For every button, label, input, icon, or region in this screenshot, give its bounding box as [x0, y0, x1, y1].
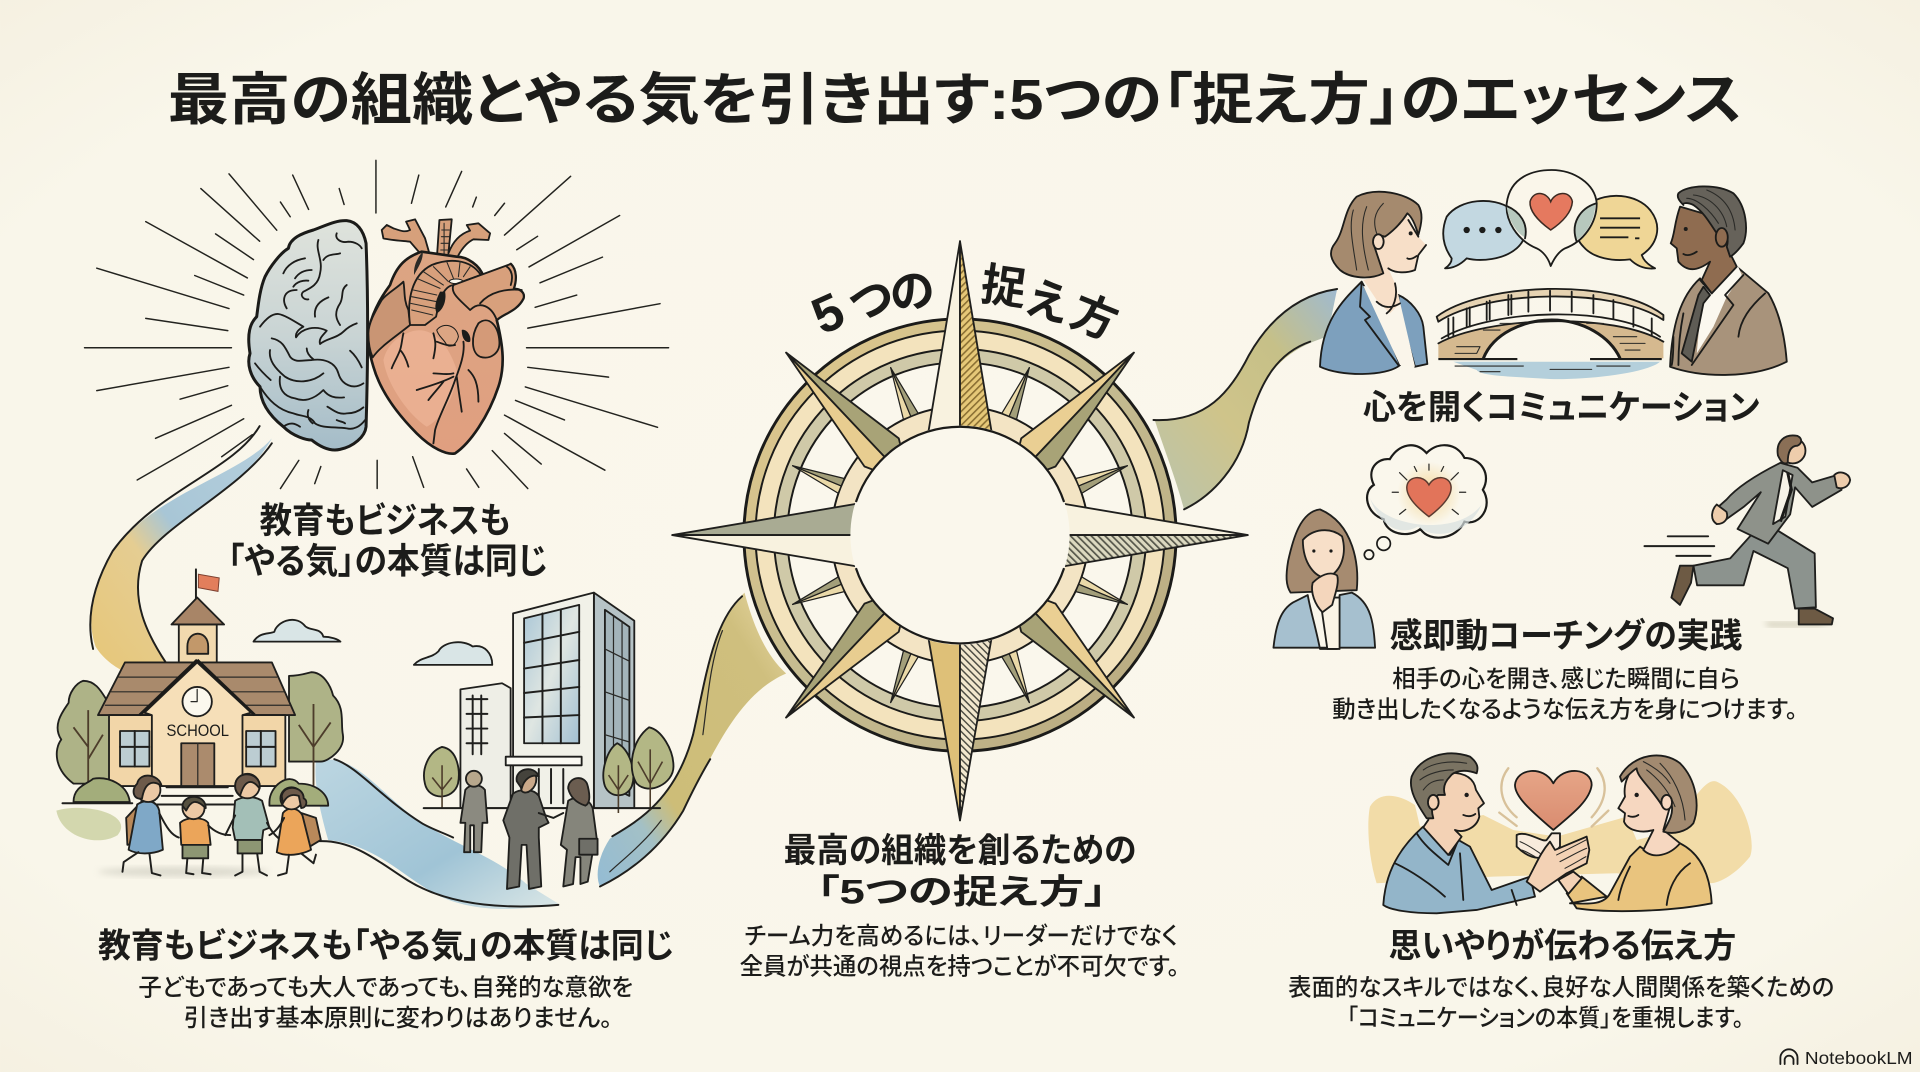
compass curved label: え: [1022, 272, 1075, 332]
text: center description: 全員が共通の視点を持つことが不可欠です。: [740, 954, 1179, 981]
text: center heading: [784, 832, 1136, 912]
compass curved label: [803, 259, 1125, 350]
floating heart: [1499, 768, 1608, 830]
woman in yellow sweater: [1567, 755, 1712, 911]
school roof: [98, 662, 295, 715]
windows: [120, 731, 276, 767]
door: [181, 743, 214, 786]
text: center description: チーム力を高めるには、リーダーだけでなく: [744, 923, 1178, 950]
legs: [1693, 522, 1816, 609]
businessman at left: [460, 771, 487, 852]
text: center heading: 「5つの捉え方」: [817, 874, 1107, 912]
illustration: business buildings and people: [424, 593, 673, 889]
woman in blue jacket: [1320, 192, 1427, 374]
illustration: thinking woman: [1273, 435, 1850, 649]
clock: [182, 687, 212, 716]
arrow: ribbon from business to compass: [598, 593, 786, 886]
heart body: [368, 252, 524, 454]
illustration: caring couple with heart: [1368, 753, 1752, 913]
compass curved label: の: [886, 263, 938, 321]
left atrium flap: [368, 282, 410, 357]
child: boy with orange shirt: [180, 797, 230, 874]
text: left description: [138, 974, 633, 1032]
icon: cloud by buildings: [414, 642, 492, 665]
man in blue shirt: [1383, 753, 1535, 913]
ground wash: [56, 808, 121, 840]
business handshake pair: [503, 769, 598, 889]
tower: [171, 598, 224, 669]
text: caring description: 「コミュニケーションの本質」を重視します。: [1347, 1005, 1744, 1032]
child: girl with blue dress: [98, 776, 269, 877]
torso and arms: [1715, 463, 1842, 544]
water under bridge: [1438, 359, 1662, 379]
stone bridge: [1437, 289, 1663, 358]
man in brown jacket: [1670, 186, 1787, 375]
compass curved label: 5: [803, 281, 853, 345]
trees beside buildings: [424, 727, 673, 813]
text: coaching description: [1332, 665, 1798, 724]
pulmonary artery: [453, 264, 524, 320]
school sign: SCHOOL: [167, 721, 229, 740]
icon: NotebookLM mark: [1780, 1049, 1798, 1064]
illustration: open communication: [1320, 170, 1787, 379]
text: caring description: 表面的なスキルではなく、良好な人間関係を築くための: [1288, 974, 1834, 1001]
small building: [460, 683, 511, 808]
compass small spikes: [790, 365, 1130, 706]
compass rose: [672, 241, 1248, 820]
heading: left section: 教育もビジネスも「やる気」の本質は同じ: [98, 928, 673, 966]
compass curved label: 方: [1064, 285, 1125, 350]
child: older boy with teal shirt: [225, 774, 284, 875]
arrow: ribbon from brain to school: [90, 426, 272, 682]
heading: brain and heart label: 教育もビジネスも: [260, 501, 511, 541]
bushes: [74, 778, 328, 806]
text: caring description: [1288, 974, 1834, 1032]
speech bubble: dots: [1443, 201, 1525, 268]
compass diagonal points: [786, 353, 1134, 718]
text: center description: [740, 923, 1179, 981]
title: 最高の組織とやる気を引き出す:5つの「捉え方」のエッセンス: [168, 68, 1742, 131]
compass curved label: 捉: [978, 259, 1030, 315]
illustration: school with children: [56, 569, 343, 877]
tall building: [506, 593, 634, 808]
speech bubble: heart: [1507, 170, 1597, 266]
arrow: river from school to business: [315, 759, 558, 909]
heading: coaching: 感即動コーチングの実践: [1390, 618, 1742, 656]
child: girl with orange dress: [269, 787, 321, 875]
text: left description: 引き出す基本原則に変わりはありません。: [184, 1005, 612, 1032]
compass outer rings: [744, 319, 1176, 751]
background wash: [1368, 781, 1752, 883]
compass curved label: つ: [843, 270, 899, 332]
text: left description: 子どもであっても大人であっても、自発的な意欲を: [138, 974, 633, 1001]
trees beside school: [57, 672, 343, 796]
icon: brain: [249, 221, 368, 450]
compass center hub: [850, 425, 1070, 645]
right atrium lump: [473, 320, 499, 358]
text: coaching description: 相手の心を開き、感じた瞬間に自ら: [1392, 665, 1740, 693]
heart vessels: [382, 219, 490, 265]
thought cloud: [1367, 445, 1487, 538]
heading: communication: 心を開くコミュニケーション: [1363, 389, 1760, 427]
compass cardinal points: [672, 241, 1248, 820]
woman figure: [1273, 509, 1375, 649]
text: center heading: 最高の組織を創るための: [784, 832, 1136, 870]
arrow: ribbon from compass to communication: [1153, 289, 1337, 509]
school walls: [109, 715, 285, 786]
text: NotebookLM brand: NotebookLM: [1805, 1048, 1913, 1068]
running man: [1644, 435, 1850, 627]
aortic arch: [409, 261, 481, 325]
flag: [196, 569, 219, 600]
heading: brain and heart label: [228, 501, 547, 581]
rays around brain and heart: [85, 160, 669, 489]
heading: caring communication: 思いやりが伝わる伝え方: [1389, 927, 1736, 966]
coronary arteries: [392, 333, 478, 443]
clasped hands: [1517, 833, 1589, 894]
icon: heart: [368, 219, 524, 454]
icon: cloud by school: [253, 620, 340, 642]
steps: [157, 787, 238, 804]
speech bubble: lines: [1576, 196, 1657, 269]
heading: brain and heart label: 「やる気」の本質は同じ: [228, 541, 547, 581]
text: coaching description: 動き出したくなるような伝え方を身につけます。: [1332, 697, 1798, 724]
